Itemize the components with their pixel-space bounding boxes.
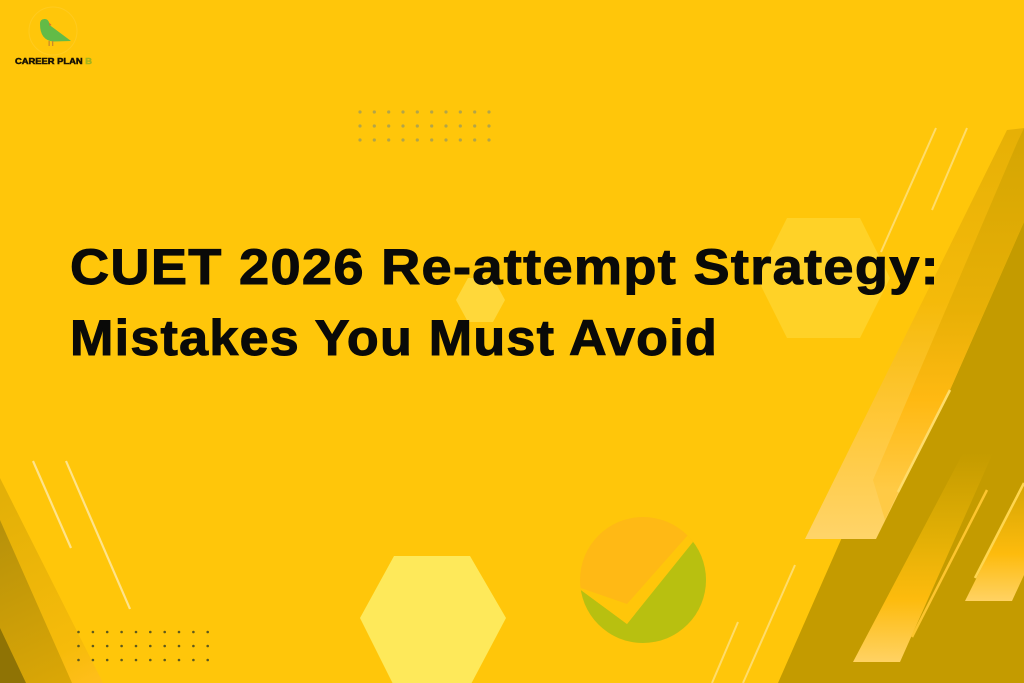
decorative lines: bottom left	[33, 461, 130, 609]
dot grid: top	[358, 110, 491, 142]
dot grid: bottom	[77, 631, 209, 661]
logo text: CAREER PLAN B	[15, 56, 92, 66]
title line 1: CUET 2026 Re-attempt Strategy:	[70, 239, 940, 295]
icon: check mark circle	[580, 517, 706, 643]
hexagon: top right	[757, 218, 890, 338]
title	[70, 239, 940, 366]
hexagon: bottom	[360, 556, 506, 683]
logo	[15, 7, 92, 66]
panel: right diagonal dark band	[778, 128, 1024, 683]
panel: left diagonal band	[0, 478, 103, 683]
title line 2: Mistakes You Must Avoid	[70, 310, 718, 366]
icon: bird	[29, 7, 77, 55]
hexagon: small centre	[456, 278, 505, 322]
decorative lines: top right	[881, 128, 967, 252]
decorative lines: bottom right	[712, 565, 795, 683]
